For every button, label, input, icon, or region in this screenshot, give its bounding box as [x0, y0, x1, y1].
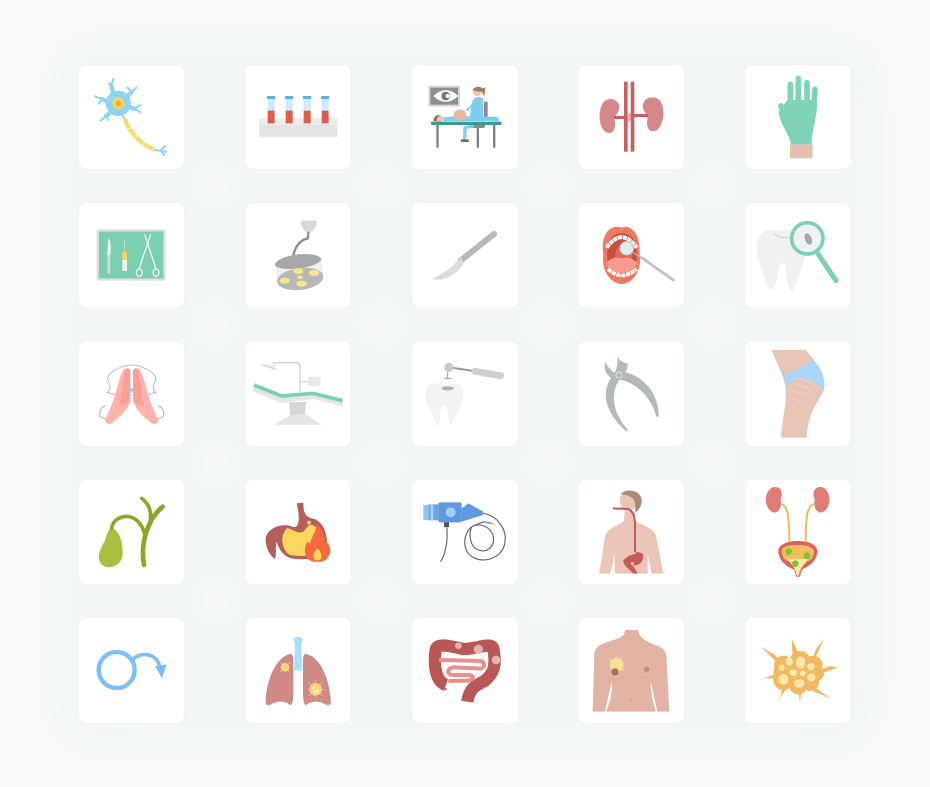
icon: blood test tubes [259, 96, 337, 137]
icon: urinary tract infection [766, 487, 830, 577]
icon: lungs with tumours [266, 637, 331, 705]
icon: dental chair [253, 363, 343, 425]
icon: gastroscopy patient [599, 490, 663, 574]
icon: surgical tray [97, 229, 166, 281]
icon: neuron [95, 79, 167, 155]
panel: card grid [78, 64, 851, 724]
icon: surgical glove [779, 78, 817, 158]
icon: breast with tumour [593, 630, 669, 712]
icon: tumour cell [757, 638, 838, 704]
icon: gallbladder [99, 498, 163, 567]
icon: tooth under magnifier [757, 223, 836, 291]
icon: stretch marks on hip [772, 350, 824, 438]
icon: orthodontic palate retainer [100, 365, 164, 424]
icon: kidneys and vessels [600, 82, 663, 152]
icon: open mouth with dental mirror [603, 227, 673, 284]
icon: dental drill and tooth [426, 363, 501, 427]
icon: stomach heartburn [266, 503, 330, 562]
icon: operating lamp [274, 221, 325, 293]
icon: ultrasound exam [428, 86, 502, 148]
icon: extraction pliers [605, 357, 659, 432]
icon: scalpel [433, 234, 494, 280]
icon: circle with arrow [99, 652, 167, 688]
icon: colon with polyps [435, 642, 500, 702]
icon: endoscope [423, 502, 505, 562]
